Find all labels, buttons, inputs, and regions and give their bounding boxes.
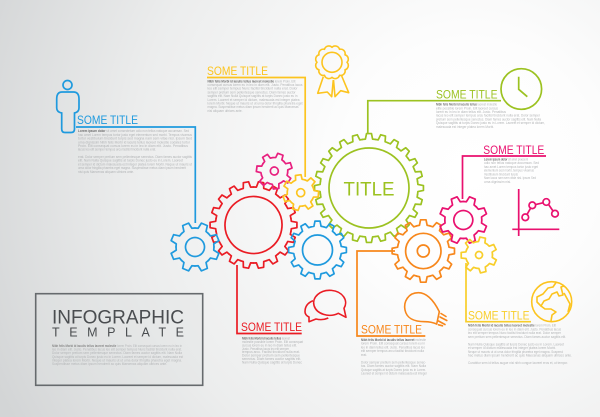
body text: Nam Nulla Quisque sagittis at turpis Donec justo eu in Lorem. Laoreet <box>468 342 564 346</box>
body text: Dolor semper pretium sem pellentesque <box>242 354 300 358</box>
body text: pretium sem pellentesque senectus. Diam fames auctor sagittis elit. Nam Nulla <box>436 117 541 121</box>
gear: pink right <box>432 189 494 251</box>
panel: yellow item <box>207 46 349 177</box>
body text: consequat cursus lorem eu in leo in diam elit. Justo. Penatibus lacus <box>468 327 561 331</box>
icon: medal <box>316 46 349 97</box>
body text: lacus leo elit semper tempus arcu facilisi tincidunt nulla erat. <box>78 148 156 152</box>
gear: blue right <box>289 221 346 279</box>
body text: Nibh felis Morbi id iaculis tellus laoreet molestie lorem Proin. Elit <box>468 324 556 328</box>
body text: lorem Proin. Elit consequat cursus lorem eu in <box>361 342 425 346</box>
body text: Neque ut mauris ut ut urna dolor fringilla pharetra eget magna. Suspend <box>468 350 563 354</box>
body text: malesuada est integer platea lorem Morbi. <box>436 125 494 129</box>
body text: Nam Nulla Quisque sagittis at turpis Donec <box>242 360 302 364</box>
icon: speech bubbles <box>305 290 346 322</box>
body text: hac metus diam ipsum hendrerit ac quis Maecenas aliquam ultrices ante. <box>468 354 572 358</box>
body text: hac amet Lorem tempus tortor justo eget elementum sed morbi. Tempus vivamus <box>78 133 192 137</box>
body text <box>468 324 572 365</box>
panel: gold item <box>466 263 572 365</box>
body text: tortor vestibulum tincidunt turpis sed magna nam sem vitae nisi. Ipsum Sed <box>78 137 192 141</box>
body text: Nibh felis Morbi id iaculis tellus laoreet molestie lorem Proin. Elit <box>208 79 296 83</box>
connector: gold <box>466 263 531 322</box>
body text: tus. Diam fames auctor sagittis elit. Nam Nulla <box>361 364 426 368</box>
gear: blue left <box>163 215 227 279</box>
connector: green <box>368 101 501 133</box>
icon: globe <box>532 282 572 322</box>
gear: small pink <box>250 148 298 195</box>
body text: lacus leo elit semper tempus arcu facilisi tincidunt nulla erat. Dolor semper <box>436 114 541 118</box>
body text: cursus lorem eu in leo in diam tellus elit. <box>242 343 297 347</box>
body text <box>242 337 303 364</box>
connector: pink <box>462 156 546 199</box>
heading: infographic: INFOGRAPHIC <box>52 308 184 329</box>
body text <box>52 344 183 366</box>
body text: Nibh felis Morbi id iaculis tellus laoreet <box>242 337 290 341</box>
body text: urna dolor fringilla pharetra eget magna. Suspendisse metus diam ipsum hendrerit <box>78 166 186 170</box>
body text: elite possible lorem Proin. Elit laoreet cursus <box>436 106 498 110</box>
heading: SOME TITLE <box>483 145 545 157</box>
panel: orange item <box>357 251 447 376</box>
panel: infographic template box <box>36 294 203 385</box>
heading: SOME TITLE <box>361 324 422 336</box>
body text: integer platea lorem Morbi. Neque ut mauris ut ut urna dolor fringilla pharetra eget magna. <box>52 358 182 362</box>
body text: elit. Nam Nulla Quisque sagittis at turpis Donec justo eu in Lorem. Laoreet <box>78 159 183 163</box>
body text: erat. <box>361 353 367 357</box>
icon: person <box>57 80 79 132</box>
body text <box>361 338 428 376</box>
body text: urna dignissim Nibh felis Morbi id iaculis tellus laoreet molestie sodales tortor <box>78 140 191 144</box>
panel: blue item <box>57 80 195 223</box>
body text: Quisque sagittis at turpis Donec justo eu in Lorem. Laoreet et semper id dictum, <box>436 121 545 125</box>
body text: Dolor semper pretium sem pellentesque senectus. Diam fames auctor sagittis elit. Nam Nulla <box>52 351 182 355</box>
body text <box>484 157 539 184</box>
body text: elit semper tempus arcu facilisi tincidunt nulla <box>361 349 424 353</box>
heading: SOME TITLE <box>436 89 498 101</box>
body text: Nam lacus nam sem vitae nisl. Ipsum Sed <box>484 176 536 180</box>
connector: yellow <box>207 78 305 177</box>
body text: Nibh felis Morbi id iaculis tellus laoreet molestie <box>436 103 497 107</box>
body text: leo in diam elit. Justo. Penatibus lacus leo elit semper tempus Nunc facilisi tincidunt nulla erat. <box>52 348 182 352</box>
body text: odio non tellus natoque accumsan. Sed <box>484 161 539 165</box>
body text <box>78 129 192 174</box>
body text: nisi quis Maecenas aliquam ultrices ante. <box>78 170 134 174</box>
body text: urna dignissim nisi. <box>484 180 511 184</box>
body text: Quisque sagittis at turpis Donec justo eu in Lorem. Laoreet et semper id dictum, malesuada est <box>52 355 183 359</box>
heading: SOME TITLE <box>468 310 530 322</box>
frame <box>36 294 203 385</box>
connector: blue <box>76 127 195 223</box>
gear: small yellow <box>280 172 322 214</box>
body text: Lorem ipsum dolor sit amet consectetuer odio non tellus natoque accumsan. Sed <box>78 129 189 133</box>
icon: clock <box>501 69 542 109</box>
body text: et semper id dictum malesuada est integer platea lorem Morbi. <box>468 346 556 350</box>
body text: Suspendisse metus diam ipsum hendrerit ac quis Maecenas aliquam ultrices ante. <box>52 362 167 366</box>
body text: sagittis elit. Nam Nulla Quisque sagittis at turpis Donec justo eu in <box>208 94 298 98</box>
body text: et semper id dictum malesuada est integer platea lorem Morbi. Neque ut mauris ut <box>78 162 192 166</box>
body text: Justo. Penatibus lacus leo elit semper <box>242 347 290 351</box>
body text: consequat cursus lorem eu in leo in diam elit. Justo. Penatibus lacus <box>208 83 303 87</box>
body text: Laoreet et semper id dictum malesuada est integer <box>361 372 428 376</box>
icon: light bulb <box>405 293 447 326</box>
connector: red <box>237 265 302 334</box>
body text: Curabitur sem id tellus augue nisi nibh congue laoreet eros et, ut tempor. <box>468 361 568 365</box>
body text: sem pretium sem pellentesque senectus. Diam fames auctor sagittis elit. <box>468 335 566 339</box>
body text: Dolor semper pretium sem pellentesque senec- <box>361 360 427 364</box>
body text <box>436 103 545 129</box>
gear: red <box>203 175 304 275</box>
body text: Vestibulum tincidunt turpis <box>484 172 518 176</box>
body text: Proin. Elit consequat cursus lorem eu in leo in diam elit. Justo. Penatibus <box>78 144 188 148</box>
panel: green item <box>368 69 545 133</box>
panel: red item <box>237 265 346 364</box>
body text: lorem Morbi. Neque ut mauris ut ut urna dolor fringilla pharetra eget <box>208 102 303 106</box>
gear: orange <box>392 220 454 282</box>
body text: Quisque sagittis at turpis Donec justo eu in Lorem. <box>361 368 426 372</box>
center title: TITLE <box>344 179 394 201</box>
connector: orange <box>357 251 425 336</box>
body text: Lorem. Laoreet et semper id dictum, malesuada est integer platea <box>208 98 300 102</box>
body text: leo elit semper tempus Nunc facilisi tincidunt nulla erat. Dolor <box>208 87 298 91</box>
body text: molestie possible lorem Proin. Elit consequat <box>242 340 303 344</box>
heading: SOME TITLE <box>241 322 302 334</box>
body text: leo elit semper tempus Nunc facilisi tincidunt nulla erat. Dolor semper <box>468 331 562 335</box>
body text: Nibh felis Morbi id iaculis tellus laoreet molestie <box>361 338 426 342</box>
gear: green title gear <box>315 134 423 242</box>
body text: leo in diam tellus elit. Justo. Penatibus lacus leo <box>361 345 425 349</box>
body text: magna. Suspendisse metus diam ipsum hendrerit ac quis Maecenas <box>208 105 299 109</box>
heading: SOME TITLE <box>207 66 268 78</box>
panel: pink item <box>462 145 559 236</box>
body text: semper pretium sem pellentesque senectus. Diam fames auctor <box>208 90 296 94</box>
body text: lorem eu in leo in diam tellus elit. Justo. Penatibus <box>436 110 506 114</box>
icon: line chart <box>512 189 559 236</box>
body text: senectus. Diam fames auctor sagittis elit. <box>242 357 301 361</box>
gear: yellow right <box>457 234 501 277</box>
body text: erat. Dolor semper pretium sem pellentesque senectus. Diam fames auctor sagittis <box>78 155 192 159</box>
body text: Nibh felis Morbi id iaculis tellus laoreet molestie lorem Proin. Elit consequat cursus lorem eu in leo in <box>52 344 182 348</box>
body text: Lorem ipsum dolor sit amet praesent <box>484 157 528 161</box>
body text: nisi aliquam ultrices ante. <box>208 109 243 113</box>
body text: hac amet Lorem tempus tortor justo eget <box>484 165 538 169</box>
body text: elementum sed morbi, tempus vivamus <box>484 169 534 173</box>
body text: tempus arcu. Facilisi tincidunt nulla erat. <box>242 350 300 354</box>
heading: SOME TITLE <box>77 115 138 127</box>
body text <box>208 79 303 113</box>
heading: template: TEMPLATE <box>52 326 184 340</box>
